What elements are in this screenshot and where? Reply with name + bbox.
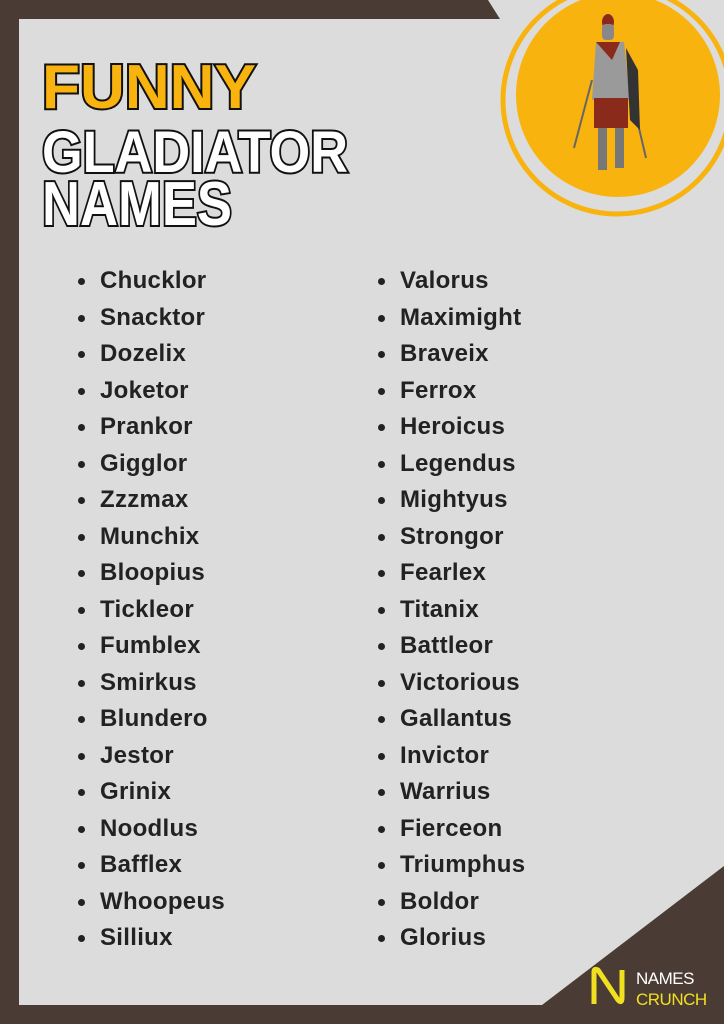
list: column 2: Victorious — [400, 668, 520, 696]
list: column 2: Titanix — [400, 596, 479, 622]
list: column 1: Bloopius — [100, 559, 205, 586]
list: column 1: Bafflex — [100, 851, 182, 878]
list: column 1: Grinix — [100, 778, 171, 805]
title: FUNNY — [42, 53, 256, 122]
list: column 1: Jestor — [100, 742, 174, 768]
list: column 2: Fierceon — [400, 814, 502, 842]
list: column 2 — [378, 267, 525, 951]
list: column 1: Zzzmax — [100, 486, 188, 513]
list: column 2: Maximight — [400, 304, 521, 330]
list: column 2: Legendus — [400, 450, 516, 476]
list: column 2: Mightyus — [400, 486, 508, 513]
list: column 1: Smirkus — [100, 668, 197, 696]
list: column 2: Heroicus — [400, 413, 505, 440]
list: column 2: Glorius — [400, 924, 486, 951]
list: column 1: Noodlus — [100, 814, 198, 842]
logo — [592, 966, 707, 1009]
list: column 1 — [78, 267, 225, 951]
list: column 2: Warrius — [400, 778, 491, 805]
list: column 1: Gigglor — [100, 450, 187, 476]
list: column 2: Boldor — [400, 888, 479, 914]
list: column 2: Ferrox — [400, 376, 476, 404]
logo: NAMES — [636, 969, 694, 988]
list: column 1: Tickleor — [100, 596, 194, 622]
list: column 1: Whoopeus — [100, 888, 225, 914]
logo: CRUNCH — [636, 990, 707, 1009]
list: column 2: Triumphus — [400, 851, 525, 878]
title — [42, 53, 350, 235]
list: column 2: Valorus — [400, 267, 489, 294]
list: column 1: Dozelix — [100, 340, 186, 367]
list: column 1: Chucklor — [100, 267, 206, 294]
list: column 2: Strongor — [400, 522, 504, 550]
title: GLADIATOR — [42, 120, 348, 185]
list: column 1: Snacktor — [100, 304, 205, 330]
list: column 2: Fearlex — [400, 559, 486, 586]
list: column 2: Invictor — [400, 742, 489, 768]
list: column 1: Prankor — [100, 413, 193, 440]
list: column 1: Munchix — [100, 522, 199, 550]
list: column 1: Silliux — [100, 924, 173, 951]
list: column 1: Blundero — [100, 705, 208, 732]
icon: gladiator circle — [500, 0, 724, 216]
list: column 2: Braveix — [400, 340, 489, 367]
list: column 2: Battleor — [400, 632, 493, 659]
list: column 1: Fumblex — [100, 632, 201, 659]
list: column 1: Joketor — [100, 376, 189, 404]
list: column 2: Gallantus — [400, 705, 512, 732]
